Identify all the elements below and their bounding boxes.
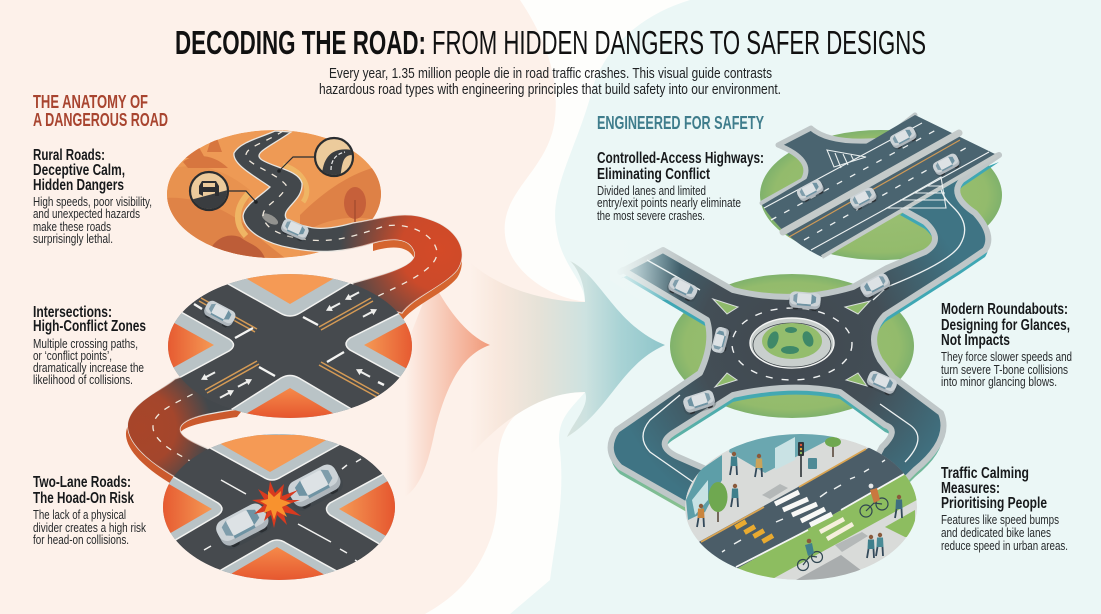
double yellow centre lines xyxy=(199,298,379,397)
corner: right xyxy=(345,313,412,378)
heading: anatomy of a dangerous road: THE ANATOMY OF xyxy=(33,92,148,112)
roundabout lane ring xyxy=(732,308,852,380)
scene: traffic calming street xyxy=(685,434,917,580)
highway cars xyxy=(888,124,920,152)
text block: modern roundabouts: Not Impacts xyxy=(941,332,1010,349)
text block: rural roads: and unexpected hazards xyxy=(33,207,140,221)
text block: two-lane roads: divider creates a high risk xyxy=(33,521,147,535)
corner: left xyxy=(168,312,234,378)
car on rural road xyxy=(278,217,311,244)
background: cool right region xyxy=(510,0,1101,614)
text block: two-lane roads xyxy=(33,474,147,547)
traffic light xyxy=(798,442,804,477)
speed bumps xyxy=(734,519,774,544)
text block: intersections: dramatically increase the xyxy=(33,361,144,375)
corner: top xyxy=(228,274,350,317)
text block: intersections: High-Conflict Zones xyxy=(33,318,146,335)
median barrier xyxy=(783,133,959,232)
text block: rural roads: High speeds, poor visibility, xyxy=(33,195,152,209)
heading: anatomy of a dangerous road xyxy=(33,92,168,130)
bike lane crossing xyxy=(820,519,853,539)
text block: rural roads: Deceptive Calm, xyxy=(33,162,125,179)
text block: modern roundabouts: turn severe T-bone collisions xyxy=(941,363,1068,377)
text block: rural roads: Hidden Dangers xyxy=(33,177,124,194)
text block: two-lane roads: Two-Lane Roads: xyxy=(33,474,131,491)
text block: two-lane roads: The Hoad-On Risk xyxy=(33,490,134,507)
text block: controlled-access highways: Divided lanes and limited xyxy=(597,184,706,198)
text block: two-lane roads: The lack of a physical xyxy=(33,508,126,522)
buildings xyxy=(686,425,834,520)
title: DECODING THE ROAD: xyxy=(175,24,426,61)
icon: crash burst xyxy=(252,481,301,528)
headlight glow xyxy=(260,211,280,227)
text block: traffic calming: Measures: xyxy=(941,480,1000,497)
text block: traffic calming xyxy=(941,465,1068,553)
lane dashes xyxy=(204,459,361,563)
corner: bottom xyxy=(231,374,351,418)
text block: controlled-access highways: Controlled-Access Highways: xyxy=(597,150,764,167)
scene: two-lane head-on crash xyxy=(163,434,395,580)
heading: anatomy of a dangerous road: A DANGEROUS ROAD xyxy=(33,110,168,130)
splitter islands xyxy=(713,299,870,387)
text block: intersections: Multiple crossing paths, xyxy=(33,337,138,351)
lane dashes xyxy=(771,130,971,240)
corner: bottom xyxy=(220,539,337,580)
road with calming features xyxy=(699,448,904,568)
railings xyxy=(736,474,904,567)
text block: controlled-access highways: Eliminating Conflict xyxy=(597,166,710,183)
upper-left slip road xyxy=(762,115,915,203)
text block: rural roads xyxy=(33,147,152,246)
subtitle: Every year, 1.35 million people die in road traffic crashes. This visual guide contrasts xyxy=(329,66,772,82)
car: left in head-on crash xyxy=(212,499,276,553)
text block: controlled-access highways: entry/exit points nearly eliminate xyxy=(597,196,741,210)
litter bin xyxy=(808,458,817,469)
icon: poor visibility callout xyxy=(190,172,258,212)
kerb lines xyxy=(701,449,866,542)
road: side wall of the connecting network xyxy=(611,162,999,511)
text block: intersections xyxy=(33,304,146,387)
green oval: roundabout xyxy=(670,274,914,418)
road: S-curve between intersections xyxy=(128,370,265,510)
car: right in head-on crash xyxy=(283,461,347,514)
controlled-access highway xyxy=(762,115,997,257)
road: side wall of the red curve xyxy=(373,240,462,320)
text block: rural roads: surprisingly lethal. xyxy=(33,232,113,246)
subtitle: hazardous road types with engineering principles that build safety into our environment. xyxy=(319,82,781,98)
trees xyxy=(708,437,841,522)
road: side wall of the S-curve xyxy=(126,378,248,485)
text block: controlled-access highways: the most severe crashes. xyxy=(597,209,705,223)
pedestrians xyxy=(697,452,902,558)
corner: right xyxy=(326,474,395,544)
yellow edge line xyxy=(789,140,960,237)
text block: intersections: likelihood of collisions. xyxy=(33,373,133,387)
text block: modern roundabouts: into minor glancing blows. xyxy=(941,375,1057,389)
text block: intersections: Intersections: xyxy=(33,304,112,321)
subtitle xyxy=(319,66,781,98)
road: winding rural road to intersection xyxy=(234,131,462,313)
lane lines on connecting roads xyxy=(643,177,965,482)
scene: high-conflict intersection xyxy=(168,274,412,418)
road dashes xyxy=(722,460,885,552)
text block: traffic calming: Traffic Calming xyxy=(941,465,1029,482)
road: roundabout arms and loops xyxy=(611,155,999,504)
corner: top xyxy=(210,434,340,481)
hatched merge areas xyxy=(827,150,946,208)
text block: two-lane roads: for head-on collisions. xyxy=(33,533,129,547)
bike lane xyxy=(738,474,916,578)
arrow wedge: orange xyxy=(385,280,490,500)
car in intersection xyxy=(200,298,239,331)
corner: left xyxy=(163,476,223,540)
fade on upper-left arm xyxy=(610,240,680,300)
green oval: highway interchange xyxy=(760,130,1002,260)
cars around roundabout xyxy=(665,271,900,417)
text block: intersections: or ‘conflict points’, xyxy=(33,349,112,363)
pavement patches xyxy=(796,555,860,580)
text block: rural roads: Rural Roads: xyxy=(33,147,105,164)
scene: rural landscape oval xyxy=(167,130,381,258)
title xyxy=(175,24,926,61)
text block: traffic calming: reduce speed in urban areas. xyxy=(941,539,1068,553)
panel: dangerous road illustration xyxy=(126,130,462,585)
text block: traffic calming: Features like speed bumps xyxy=(941,513,1059,527)
transition band with teal arrow xyxy=(467,261,665,459)
stop bars and lane dashes xyxy=(194,304,384,385)
heading: engineered for safety: ENGINEERED FOR SAFETY xyxy=(597,113,764,133)
crosswalk xyxy=(775,492,832,525)
cyclists xyxy=(798,484,888,570)
roundabout centre island xyxy=(750,318,834,368)
text block: controlled-access highways xyxy=(597,150,764,223)
text block: modern roundabouts xyxy=(941,301,1072,389)
text block: traffic calming: and dedicated bike lanes xyxy=(941,526,1051,540)
lane arrows xyxy=(199,289,379,401)
text block: traffic calming: Prioritising People xyxy=(941,495,1047,512)
carriageways xyxy=(762,115,997,257)
icon: sharp curve callout xyxy=(277,138,353,180)
text block: rural roads: make these roads xyxy=(33,220,111,234)
background: warm left region xyxy=(0,0,590,614)
panel: engineered road illustration xyxy=(610,115,1002,594)
